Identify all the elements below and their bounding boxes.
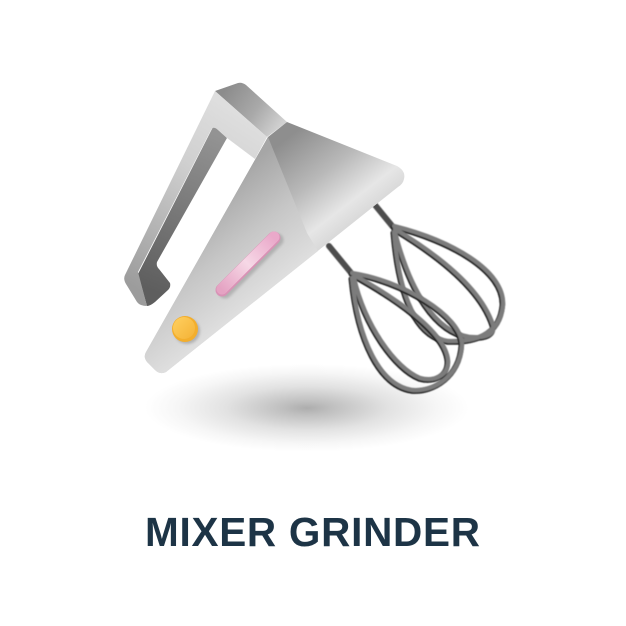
whisk: back beater [375,205,503,342]
ground shadow [145,364,469,452]
whisk: front beater [329,246,462,391]
title: MIXER GRINDER [145,509,480,555]
switch: pink slider [222,237,277,292]
handle: front face [124,91,267,306]
button: yellow [172,316,200,344]
body: right facet [145,122,404,373]
handle: inner face [138,127,227,306]
handle: top face [215,83,287,137]
body: left facet [145,137,318,373]
icon: hand mixer [124,83,503,391]
